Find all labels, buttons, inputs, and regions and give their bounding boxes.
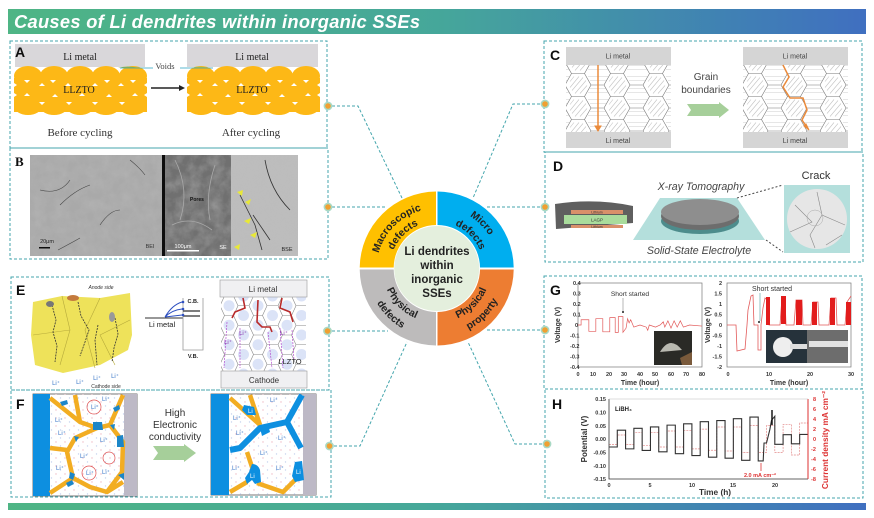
text: grain boundaries (681, 72, 731, 96)
segment: macroscopic defects: Macroscopic (372, 206, 420, 252)
segment: physical property: property (466, 298, 498, 332)
chart: right voltage vs time: 20 (807, 372, 813, 378)
segment: physical defects (360, 270, 436, 346)
icon: LLZTO honeycomb between Li metal and cathode: Li⁺ (239, 330, 247, 337)
chart: left voltage vs time: 0.4 (573, 281, 582, 287)
connector lines (327, 104, 547, 446)
panel: B SEM images: SE (219, 245, 227, 251)
chart: left voltage vs time: -0.3 (570, 354, 579, 360)
chart: right voltage vs time: Voltage (V) (705, 307, 712, 343)
icon: electrolyte before dendrite growth: Li⁺ (80, 453, 88, 460)
chart: left voltage vs time: -0.2 (570, 344, 579, 350)
icon: electrolyte before dendrite growth (33, 394, 137, 496)
text: grain boundaries: Grain (694, 72, 718, 83)
panel: B SEM images: 100μm (175, 244, 192, 250)
panel: E electronic conduction: Li⁺ (52, 380, 60, 387)
chart: potential and current density vs time: 0 (813, 437, 816, 443)
chart: left voltage vs time: 20 (606, 372, 612, 378)
segment: physical property: Physical (455, 287, 486, 318)
chart: potential and current density vs time: 0.00 (595, 437, 606, 443)
panel: E electronic conduction (11, 277, 329, 390)
panel: E electronic conduction: Li⁺ (93, 375, 101, 382)
chart: left voltage vs time: 0 (575, 323, 578, 329)
title bar: Causes of Li dendrites within inorganic SSEs (14, 11, 420, 32)
bottom bar (8, 503, 866, 510)
chart: right voltage vs time: -2 (717, 365, 722, 371)
chart: potential and current density vs time: 0.05 (595, 424, 606, 430)
icon: band diagram: V.B. (188, 354, 199, 360)
icon: honeycomb with grain boundary path (743, 47, 848, 148)
icon: LLZTO honeycomb between Li metal and cathode: Li metal (249, 285, 278, 294)
text: x-ray tomography: X-ray Tomography (657, 181, 745, 193)
chart: right voltage vs time: -0.5 (713, 334, 722, 340)
arrow (153, 444, 196, 462)
chart: left voltage vs time: 30 (621, 372, 627, 378)
icon: LLZTO honeycomb between Li metal and cathode (220, 280, 307, 388)
icon: electrolyte after dendrite growth: Li⁺ (236, 430, 244, 437)
chart: right voltage vs time: 1 (719, 302, 722, 308)
panel: A voids before and after cycling (10, 41, 327, 148)
icon: LLZTO honeycomb between Li metal and cathode: Cathode (249, 376, 280, 385)
chart: potential and current density vs time: -0.15 (593, 477, 606, 483)
chart: right voltage vs time: -1.5 (713, 354, 722, 360)
icon: electrolyte before dendrite growth: Li⁺ (86, 470, 94, 477)
chart: left voltage vs time: 70 (683, 372, 689, 378)
chart: potential and current density vs time: 6 (813, 407, 816, 413)
icon: band diagram: C.B. (188, 299, 199, 305)
icon: band diagram (145, 298, 203, 360)
chart: left voltage vs time: 80 (699, 372, 705, 378)
chart: left voltage vs time: 0.2 (573, 302, 581, 308)
panel: E electronic conduction: E (16, 282, 25, 298)
center label: Li dendrites (404, 246, 470, 258)
icon: yellow electrolyte block with cracks (31, 293, 132, 373)
icon: cell cross-section: Lithium (591, 225, 603, 229)
chart: potential and current density vs time: Time (h) (699, 487, 731, 497)
panel: F high electronic conductivity: F (16, 396, 25, 412)
chart: potential and current density vs time: 10 (689, 483, 695, 489)
chart: left voltage vs time: -0.1 (570, 334, 579, 340)
segment: macroscopic defects (360, 192, 436, 268)
chart: potential and current density vs time: -2 (811, 447, 816, 453)
icon: electrolyte after dendrite growth: Li⁺ (232, 465, 240, 472)
chart: potential and current density vs time: 20 (772, 483, 778, 489)
icon: LLZTO honeycomb between Li metal and cathode: LLZTO (278, 357, 302, 366)
panel: E electronic conduction: Li⁺ (76, 379, 84, 386)
icon: honeycomb with straight path (566, 47, 671, 148)
panel: C grain boundaries: C (550, 47, 560, 63)
panel: B SEM images: B (15, 154, 24, 169)
panel: H LiBH4 potential curve: H (552, 396, 562, 412)
segment: micro defects: Micro (470, 210, 492, 234)
chart: potential and current density vs time: 2 (813, 427, 816, 433)
panel: E electronic conduction: Cathode side (91, 384, 121, 390)
chart: right voltage vs time (705, 281, 854, 387)
chart: potential and current density vs time: Potential (V) (580, 415, 589, 462)
chart: left voltage vs time: -0.4 (570, 365, 580, 371)
panel: A voids before and after cycling: A (15, 44, 25, 60)
icon: electrolyte after dendrite growth: Li⁺ (233, 415, 241, 422)
text: high electronic conductivity: Electronic (153, 420, 197, 431)
icon: cell cross-section (555, 201, 633, 229)
icon: LLZTO honeycomb between Li metal and cathode: Li⁺ (224, 339, 232, 346)
chart: left voltage vs time: Time (hour) (621, 380, 659, 387)
chart: right voltage vs time: 0 (726, 372, 730, 378)
icon: electrolyte after dendrite growth: Li (248, 409, 253, 415)
chart: left voltage vs time: 0.1 (573, 312, 581, 318)
icon: electrolyte before dendrite growth: Li⁺ (58, 430, 66, 437)
arrow (687, 102, 729, 118)
panel: A voids before and after cycling: Li metal (63, 52, 97, 63)
chart: left voltage vs time: 60 (668, 372, 674, 378)
icon: LLZTO honeycomb between Li metal and cathode: Li⁺ (280, 330, 288, 337)
chart: left voltage vs time (555, 281, 705, 387)
icon: electrolyte after dendrite growth: Li⁺ (270, 397, 278, 404)
panel: B SEM images: 20μm (40, 239, 54, 245)
chart: potential and current density vs time: 8 (813, 397, 816, 403)
chart: left voltage vs time: 50 (652, 372, 658, 378)
text: high electronic conductivity: High (165, 408, 185, 419)
icon: electrolyte after dendrite growth (211, 394, 316, 495)
chart: right voltage vs time: 1.5 (714, 292, 722, 298)
panel: D X-ray tomography: D (553, 158, 563, 174)
icon: electrolyte before dendrite growth: Li⁺ (100, 437, 108, 444)
panel: B SEM images: BSE (281, 247, 293, 253)
icon: electrolyte before dendrite growth: Li⁺ (56, 465, 64, 472)
icon: electrolyte before dendrite growth: Li⁺ (102, 469, 110, 476)
chart: potential and current density vs time: 15 (730, 483, 736, 489)
panel: E electronic conduction: Li⁺ (111, 373, 119, 380)
center label: SSEs (422, 288, 452, 300)
chart: right voltage vs time: 30 (848, 372, 854, 378)
panel: G voltage profiles (544, 276, 862, 389)
icon: cell cross-section: Lithium (591, 210, 603, 214)
icon: electrolyte after dendrite growth: Li⁺ (276, 465, 284, 472)
segment: micro defects: defects (456, 220, 484, 250)
icon: electrolyte after dendrite growth: Li⁺ (260, 450, 268, 457)
chart: potential and current density vs time: 0.15 (595, 397, 606, 403)
panel: B SEM images: BEI (146, 244, 155, 250)
icon: electrolyte before dendrite growth: Li⁺ (91, 404, 99, 411)
panel: E electronic conduction: Anode side (87, 285, 114, 291)
text: crack: Crack (802, 170, 831, 182)
icon: electrolyte after dendrite growth: Li (250, 474, 255, 480)
icon: crack image (784, 185, 850, 253)
icon: electrolyte before dendrite growth: Li⁺ (55, 417, 63, 424)
panel: A voids before and after cycling: LLZTO (236, 85, 268, 96)
chart: left voltage vs time: Voltage (V) (555, 307, 562, 343)
text: high electronic conductivity: conductivity (149, 432, 201, 443)
panel: A voids before and after cycling: Li metal (235, 52, 269, 63)
chart: left voltage vs time: 40 (637, 372, 643, 378)
panel: B SEM images: Pores (190, 197, 204, 203)
chart: right voltage vs time: Time (hour) (770, 380, 808, 387)
text: high electronic conductivity (149, 408, 201, 443)
chart: potential and current density vs time: -4 (811, 457, 817, 463)
panel: H LiBH4 potential curve (545, 389, 863, 498)
center label: within (419, 260, 454, 272)
chart: left voltage vs time: 10 (590, 372, 596, 378)
panel: A voids before and after cycling: Before cycling (47, 127, 113, 139)
segment: micro defects (438, 192, 514, 268)
segment: macroscopic defects: defects (388, 221, 418, 249)
icon: band diagram: Li metal (149, 320, 175, 329)
segment: physical defects: defects (378, 301, 404, 328)
icon: electrolyte after dendrite growth: Li⁺ (278, 435, 286, 442)
chart: potential and current density vs time: -0.10 (593, 464, 606, 470)
chart: potential and current density vs time: 2.0 mA cm⁻² (744, 472, 776, 479)
panel: D X-ray tomography (545, 152, 863, 262)
chart: right voltage vs time: 10 (766, 372, 772, 378)
chart: right voltage vs time: 0.5 (714, 312, 722, 318)
chart: potential and current density vs time: 0.10 (595, 410, 606, 416)
chart: right voltage vs time: -1 (717, 344, 722, 350)
icon: electrolyte after dendrite growth: Li (296, 470, 301, 476)
chart: right voltage vs time: 0 (719, 323, 722, 329)
segment: physical property (438, 270, 514, 346)
text: solid-state electrolyte: Solid-State Electrolyte (647, 245, 751, 257)
center donut diagram (360, 192, 514, 346)
panel: G voltage profiles: G (550, 282, 561, 298)
icon: cell cross-section: LAGP (591, 218, 603, 222)
panel: A voids before and after cycling: After cycling (222, 127, 281, 139)
chart: left voltage vs time: Short started (611, 291, 649, 298)
chart: right voltage vs time: Short started (752, 286, 792, 293)
chart: potential and current density vs time: 0 (607, 483, 611, 489)
icon: electrolyte disc on light beam (633, 198, 765, 240)
chart: left voltage vs time: 0 (576, 372, 580, 378)
chart: potential and current density vs time (580, 391, 830, 497)
panel: A voids before and after cycling: LLZTO (63, 85, 95, 96)
connector nodes (324, 100, 551, 450)
chart: potential and current density vs time: -6 (811, 467, 816, 473)
segment: physical defects: Physical (387, 286, 418, 318)
chart: left voltage vs time: 0.3 (573, 292, 581, 298)
title bar (8, 9, 866, 34)
panel: B SEM images (10, 148, 328, 259)
chart: right voltage vs time: 2 (719, 281, 722, 287)
chart: potential and current density vs time: Current density mA cm⁻² (820, 391, 830, 489)
center label: inorganic (411, 274, 463, 286)
chart: potential and current density vs time: 5 (648, 483, 652, 489)
center label (394, 226, 479, 311)
chart: potential and current density vs time: 4 (813, 417, 817, 423)
chart: potential and current density vs time: -0.05 (593, 450, 606, 456)
panel: C grain boundaries (544, 41, 862, 152)
panel: A voids before and after cycling: Voids (155, 61, 175, 71)
chart: potential and current density vs time: -8 (811, 477, 816, 483)
chart: potential and current density vs time: LiBH₄ (615, 407, 632, 413)
icon: electrolyte before dendrite growth: Li⁺ (102, 396, 110, 403)
panel: F high electronic conductivity (11, 390, 331, 497)
text: grain boundaries: boundaries (681, 85, 731, 96)
